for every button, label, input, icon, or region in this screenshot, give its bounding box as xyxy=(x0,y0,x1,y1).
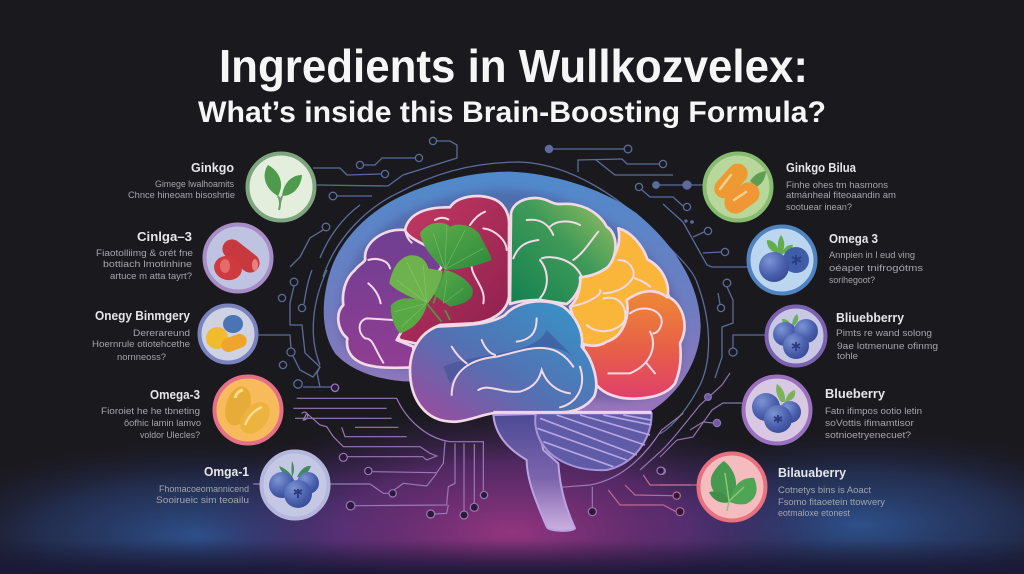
cerebellum and brain stem xyxy=(493,412,652,531)
description xyxy=(825,406,922,440)
ingredient left 1 xyxy=(128,154,314,220)
description xyxy=(156,484,249,505)
brain lobes xyxy=(338,196,684,422)
ingredient right 3 xyxy=(766,306,938,366)
description: Annpien in l eud ving xyxy=(829,250,915,260)
ingredient left 3 xyxy=(92,306,256,362)
description: Cotnetys bins is Aoact xyxy=(778,485,872,495)
icon: blueberries xyxy=(262,452,328,518)
icon: mixed capsules xyxy=(200,306,256,362)
label: Bliuebberry xyxy=(836,311,904,325)
description xyxy=(778,485,886,518)
brain stem xyxy=(493,414,575,531)
lobe: blue lower xyxy=(410,301,596,422)
ingredient right 5 xyxy=(698,454,886,520)
label: Cinlga–3 xyxy=(137,230,192,244)
circuit traces: lower left xyxy=(253,384,690,519)
ingredient left 4 xyxy=(101,376,282,444)
icon: green leaves xyxy=(698,454,766,520)
description: Finhe ohes tm hasmons xyxy=(786,180,889,190)
description xyxy=(836,328,938,361)
label: Bilauaberry xyxy=(778,466,846,480)
ginkgo leaf on brain xyxy=(389,223,492,333)
description xyxy=(92,328,190,362)
description: Pimts re wand solong xyxy=(836,328,932,338)
description: sotnioetryenecuet? xyxy=(825,430,911,440)
ingredient left 2 xyxy=(96,224,272,292)
icon: leaf sprig xyxy=(248,154,314,220)
description: Fsomo fitaoetein ttowvery xyxy=(778,497,886,507)
icon: blueberries xyxy=(748,226,816,294)
description: Hoernrule otiotehcethe xyxy=(92,339,190,349)
lobe: red upper left xyxy=(377,196,509,344)
description xyxy=(96,248,193,281)
description: eotmaloxe etonest xyxy=(778,508,850,518)
description: voldor Ulecles? xyxy=(140,430,200,440)
description: nornneoss? xyxy=(117,352,166,362)
label: Omga-1 xyxy=(204,465,249,479)
description: Chnce hineoam bisoshrtie xyxy=(128,190,235,200)
icon: red capsules xyxy=(204,224,272,292)
description xyxy=(101,406,201,440)
ingredient right 2 xyxy=(748,226,924,294)
label: Omega-3 xyxy=(150,388,200,402)
description: sorihegoot? xyxy=(829,275,875,285)
icon: omega capsules xyxy=(214,376,282,444)
description: Dererareund xyxy=(133,328,190,338)
lobe: purple left xyxy=(338,230,442,368)
cerebellum xyxy=(535,413,652,470)
circuit traces: lower right xyxy=(640,373,742,485)
description: Fioroiet he he tbneting xyxy=(101,406,200,416)
brain fold lines xyxy=(360,212,662,407)
label: Omega 3 xyxy=(829,232,878,246)
description: Fatn ifimpos ootio letin xyxy=(825,406,922,416)
description: sootuear inean? xyxy=(786,202,852,212)
description xyxy=(128,179,235,200)
brain halo xyxy=(324,172,701,417)
brain illustration xyxy=(324,172,701,531)
description: 9ae lotmenune ofinmg xyxy=(837,341,938,351)
ingredient right 4 xyxy=(744,376,922,444)
lobe: green upper right xyxy=(510,198,615,304)
description xyxy=(829,250,924,285)
ingredient right 1 xyxy=(704,154,896,220)
title xyxy=(198,40,826,129)
label: Blueberry xyxy=(825,387,885,401)
label: Ginkgo xyxy=(191,161,234,175)
cerebellum top bar xyxy=(493,408,652,417)
icon: blueberries xyxy=(766,306,826,366)
lobe: yellow right xyxy=(570,228,668,346)
description: Sooirueic sim teoailu xyxy=(156,495,249,505)
title line 2: What’s inside this Brain-Boosting Formula? xyxy=(198,96,826,129)
description: soVottis ifimamtisor xyxy=(825,418,914,428)
description xyxy=(786,180,896,212)
description: tohle xyxy=(837,351,858,361)
description: ôofhic lamin lamvo xyxy=(124,418,201,428)
description: bottiach lmotinhine xyxy=(103,259,192,269)
description: atmánheal fiteoaandin am xyxy=(786,190,896,200)
description: Gimege lwalhoamits xyxy=(155,179,234,189)
label: Onegy Binmgery xyxy=(95,309,190,323)
description: oéaper tnifrogótms xyxy=(829,263,924,273)
description: Fiaotolliimg & orét fne xyxy=(96,248,193,258)
circuit traces: upper and side xyxy=(258,137,767,434)
icon: blueberries xyxy=(744,376,810,444)
title line 1: Ingredients in Wullkozvelex: xyxy=(219,40,808,92)
lobe: orange red right xyxy=(583,289,684,399)
label: Ginkgo Bilua xyxy=(786,161,857,175)
description: Fhomacoeomannicend xyxy=(159,484,249,494)
icon: orange capsules xyxy=(704,154,772,220)
description: artuce m atta tayrt? xyxy=(110,271,192,281)
ingredient left 5 xyxy=(156,452,328,518)
lobe shading xyxy=(443,330,573,383)
